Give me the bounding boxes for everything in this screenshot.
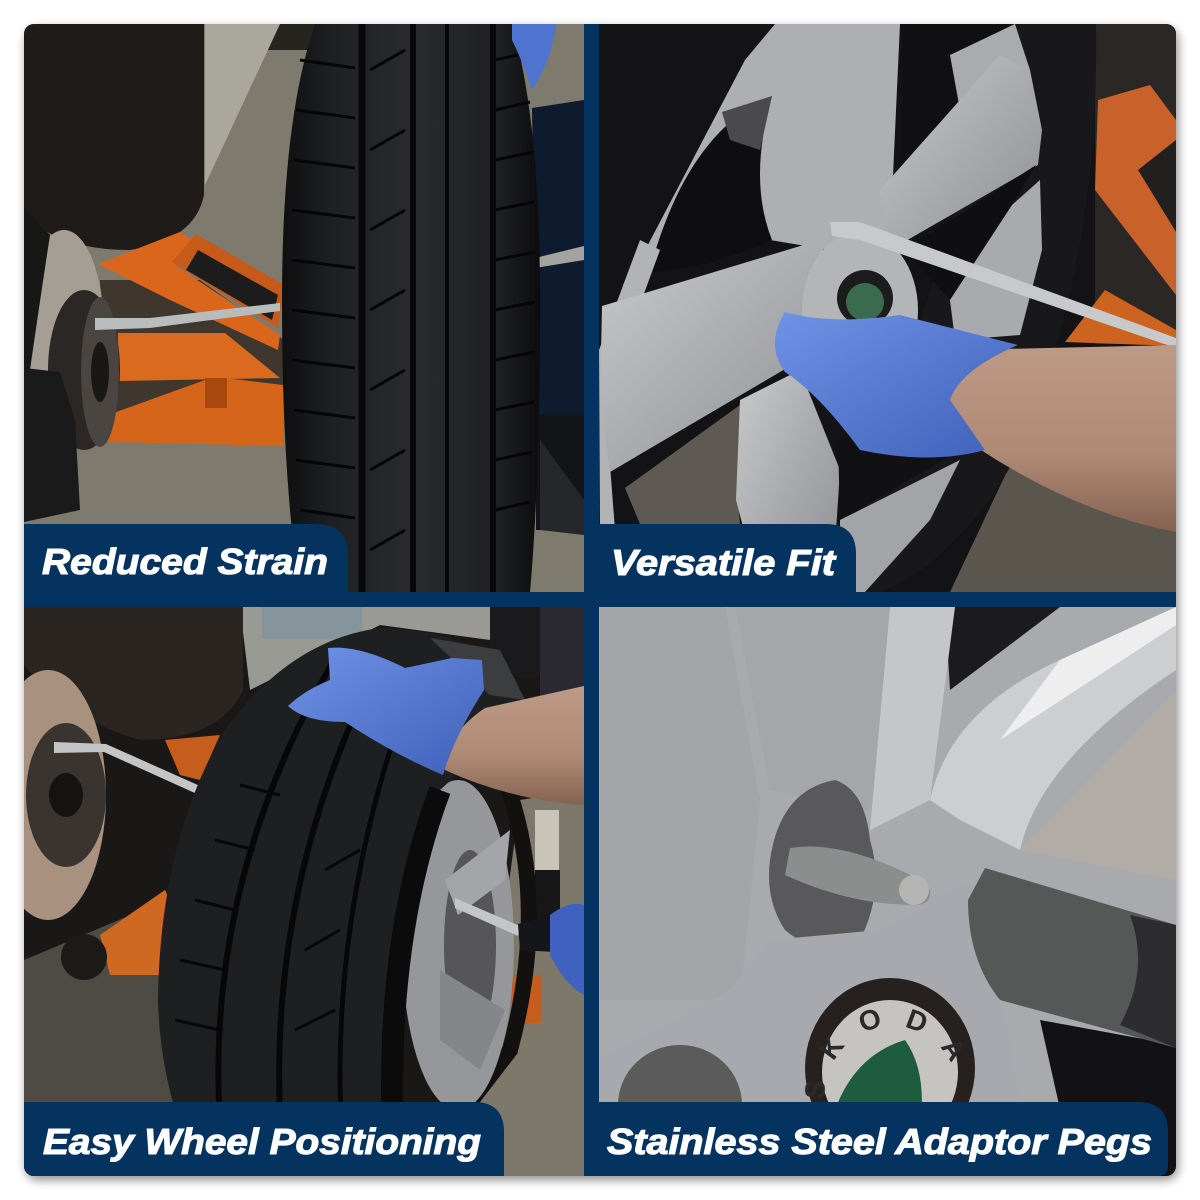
caption: versatile fit	[584, 524, 856, 592]
jack	[165, 735, 220, 780]
spoke: right	[950, 180, 1042, 340]
ground	[24, 917, 173, 1176]
caption: stainless steel adaptor pegs	[584, 1102, 1168, 1176]
wheel arch	[24, 607, 243, 740]
rim left lower ring	[599, 240, 660, 530]
caption: easy wheel positioning	[24, 1102, 504, 1176]
socket bar	[95, 303, 280, 330]
caption: versatile fit: Versatile Fit	[611, 542, 837, 583]
spoke: bottom	[736, 375, 839, 525]
panel: easy wheel positioning photo	[0, 607, 585, 1176]
window lower right dark	[838, 466, 840, 485]
jack: shadow under body	[100, 280, 284, 420]
rear sidewall arc	[470, 780, 529, 1102]
badge lettering: SKODA	[805, 1009, 963, 1098]
dark background	[945, 607, 1060, 690]
peg	[785, 847, 930, 905]
sleeve handle	[968, 868, 1176, 1048]
jack: side and base	[118, 333, 280, 381]
tyre	[158, 628, 525, 1176]
window lower left	[625, 405, 740, 524]
spoke: lower right	[840, 460, 960, 592]
glove	[512, 24, 556, 90]
spoke: left	[601, 245, 824, 472]
rim	[402, 780, 514, 1110]
spokes	[600, 607, 760, 1000]
panel: stainless steel adaptor pegs photo	[599, 607, 1176, 1176]
tyre	[282, 24, 540, 592]
caption: easy wheel positioning: Easy Wheel Positioning	[43, 1121, 481, 1162]
arm	[445, 686, 584, 805]
glove	[775, 312, 1018, 458]
background top right	[1095, 24, 1176, 344]
jack: arm and top plate	[98, 232, 280, 350]
caption: reduced strain: Reduced Strain	[42, 541, 328, 582]
car body	[240, 607, 490, 690]
lower hub	[600, 880, 1030, 1176]
bar and handle	[455, 898, 520, 936]
jack post right	[512, 975, 542, 1023]
hole	[769, 780, 876, 948]
rim upper left ring and wide face	[640, 24, 900, 260]
badge	[805, 978, 975, 1158]
top glove	[288, 648, 484, 775]
tyre outer right	[1004, 24, 1096, 476]
car body	[205, 24, 280, 185]
brake disc	[30, 230, 102, 371]
panel: versatile fit photo	[599, 24, 1176, 592]
caption: reduced strain	[24, 524, 348, 592]
spoke: upper right	[890, 56, 1042, 240]
right glove	[550, 904, 584, 995]
caption: stainless steel adaptor pegs: Stainless Steel Adaptor Pegs	[607, 1121, 1152, 1162]
wheel arch dark	[24, 24, 204, 250]
window right	[934, 165, 1036, 300]
disc	[24, 670, 106, 920]
legs and shoe	[532, 100, 584, 415]
hub	[802, 243, 918, 320]
panel: reduced strain photo	[24, 24, 584, 592]
badge	[837, 270, 893, 320]
bar	[830, 222, 1176, 348]
bar	[54, 742, 200, 794]
window upper left	[656, 96, 772, 258]
ground	[950, 465, 1176, 592]
window top right	[900, 24, 1010, 180]
jack	[1095, 85, 1176, 295]
arm	[945, 345, 1176, 532]
